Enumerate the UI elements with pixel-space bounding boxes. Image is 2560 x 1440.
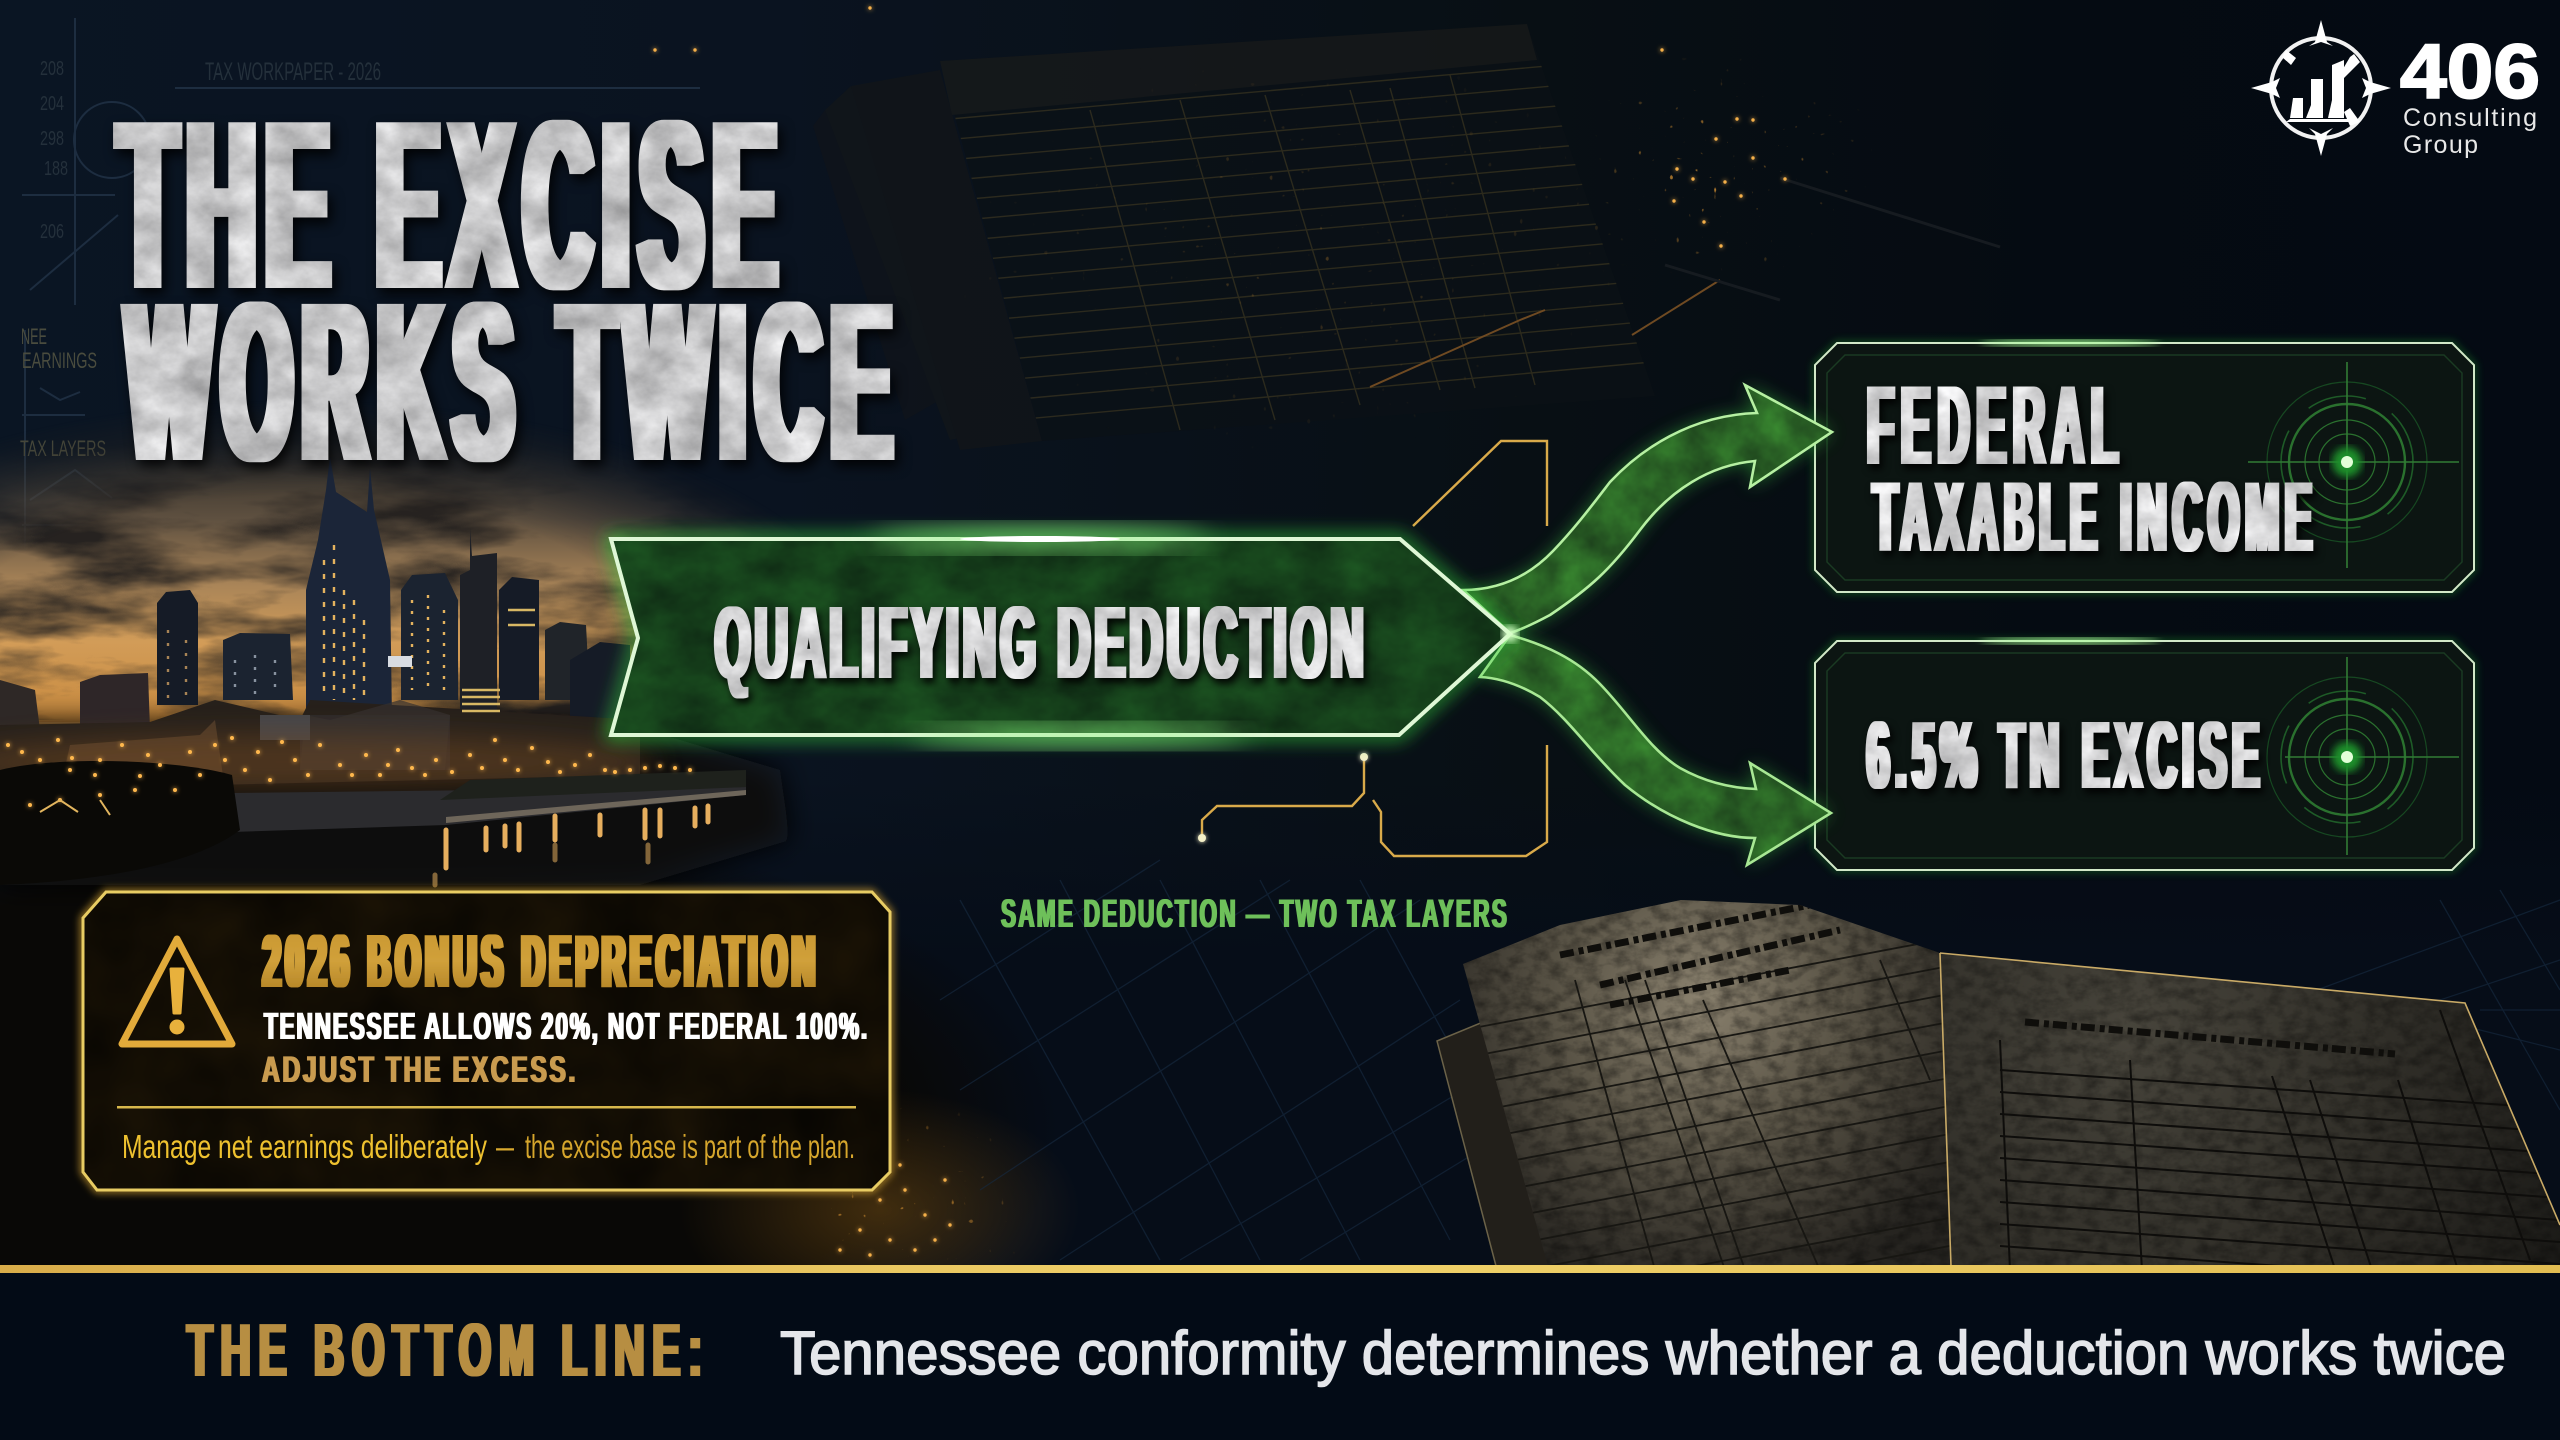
- skyscraper silhouettes: [0, 457, 630, 730]
- river reflections: [435, 806, 708, 885]
- orange scratches and streaks: [1370, 178, 2000, 387]
- text: net earnings label: EARNINGS: [22, 348, 97, 373]
- bottom line bar: [0, 1265, 2560, 1440]
- icon: warning triangle: [122, 939, 232, 1044]
- icon: green target: [2248, 362, 2459, 568]
- bottom line label: THE BOTTOM LINE:: [187, 1308, 710, 1392]
- panel: 6.5% TN excise: [1815, 638, 2474, 870]
- text: axis numbers: [40, 58, 68, 243]
- gold circuit lines: [1198, 441, 1547, 856]
- tax workpaper sheets, top centre: [940, 24, 1644, 430]
- caption: same deduction two tax layers: SAME DEDUCTION — TWO TAX LAYERS: [1001, 892, 1509, 936]
- dark ground behind city: [0, 722, 790, 885]
- text: THE EXCISE: [119, 71, 787, 340]
- text: 2026 BONUS DEPRECIATION: [263, 919, 820, 1003]
- callout body line 2: ADJUST THE EXCESS.: [262, 1049, 578, 1090]
- text: axis numbers: 206: [40, 221, 64, 243]
- foreground trees: [0, 761, 240, 885]
- text: tax layers label: TAX LAYERS: [20, 436, 106, 461]
- text: WORKS TWICE: [127, 256, 902, 509]
- icon: compass with rising bars: [2251, 20, 2391, 156]
- text: axis numbers: 204: [40, 93, 64, 115]
- callout footnote: [122, 1128, 855, 1165]
- river promenade: [232, 787, 746, 832]
- text: net earnings label: NEE: [21, 324, 47, 349]
- bottom line statement: Tennessee conformity determines whether a deduction works twice: [780, 1319, 2506, 1387]
- text: tax workpaper label: TAX WORKPAPER - 2026: [205, 58, 381, 86]
- blueprint grid lines: [940, 860, 2560, 1260]
- title: [119, 71, 902, 509]
- text: net earnings label: [21, 324, 97, 373]
- Nashville skyline photo: [0, 434, 795, 888]
- bright gold sparks: [655, 8, 1785, 1255]
- callout footnote: the excise base is part of the plan.: [525, 1128, 855, 1165]
- callout footnote: —: [496, 1128, 514, 1165]
- gold dust particles: [831, 58, 1854, 1260]
- text: axis numbers: 298: [40, 128, 64, 150]
- arrow: to federal taxable income: [1463, 385, 1832, 633]
- text: axis numbers: 188: [44, 158, 68, 180]
- callout body line 1: TENNESSEE ALLOWS 20%, NOT FEDERAL 100%.: [264, 1006, 869, 1048]
- faint HUD annotations, top left: [20, 18, 700, 563]
- worksheet papers, bottom right: [1436, 900, 2560, 1265]
- panel: federal taxable income: FEDERAL: [1867, 363, 2125, 488]
- logo number: 406: [2400, 29, 2540, 115]
- banner: qualifying deduction: QUALIFYING DEDUCTION: [715, 585, 1368, 700]
- promenade highlight strokes: [40, 800, 110, 815]
- sky: [0, 434, 759, 724]
- banner: qualifying deduction: [611, 530, 1518, 743]
- callout: 2026 bonus depreciation: [83, 892, 890, 1190]
- logo line 1: Consulting: [2403, 104, 2537, 132]
- logo line 2: Group: [2403, 131, 2478, 159]
- callout footnote: Manage net earnings deliberately: [122, 1128, 487, 1165]
- city windows: [168, 545, 535, 711]
- arrow: to 6.5% TN excise: [1480, 635, 1831, 865]
- city low buildings: [0, 700, 640, 790]
- text: plan label: PLAN: [25, 538, 63, 563]
- logo: 406 Consulting Group: [2251, 20, 2540, 159]
- panel: federal taxable income: [1815, 340, 2474, 592]
- icon: green target: [2267, 657, 2459, 855]
- city street lights: [8, 738, 690, 805]
- text: axis numbers: 208: [40, 58, 64, 80]
